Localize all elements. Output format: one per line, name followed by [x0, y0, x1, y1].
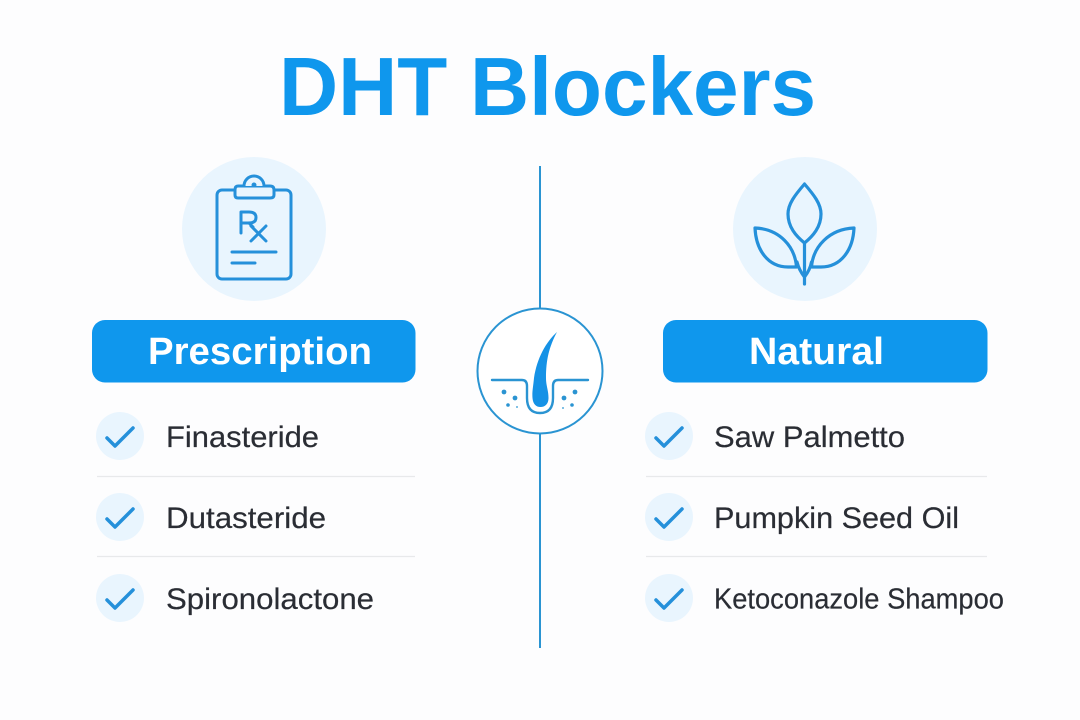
list item: Finasteride — [96, 412, 319, 460]
list item: Spironolactone — [96, 574, 374, 622]
list item: Ketoconazole Shampoo: Ketoconazole Shampoo — [714, 584, 1004, 616]
list item: Spironolactone: Spironolactone — [166, 583, 374, 616]
heading: prescription: Prescription — [148, 331, 372, 373]
icon: hair follicle — [478, 308, 602, 434]
list item: Pumpkin Seed Oil: Pumpkin Seed Oil — [714, 502, 959, 535]
heading: natural: Natural — [749, 331, 884, 373]
list item: Dutasteride — [96, 493, 326, 541]
list item: Pumpkin Seed Oil — [645, 493, 959, 541]
list item: Dutasteride: Dutasteride — [166, 502, 326, 535]
list item: Finasteride: Finasteride — [166, 421, 319, 454]
panel: prescription — [92, 320, 416, 622]
heading: natural — [663, 320, 988, 382]
list item: Saw Palmetto: Saw Palmetto — [714, 421, 905, 454]
panel: natural — [645, 320, 1004, 622]
list item: Ketoconazole Shampoo — [645, 574, 1004, 622]
list item: Saw Palmetto — [645, 412, 905, 460]
title: DHT Blockers — [279, 40, 816, 133]
icon: prescription clipboard — [182, 157, 326, 301]
icon: natural leaves — [733, 157, 877, 301]
center divider line — [539, 166, 541, 648]
heading: prescription — [92, 320, 416, 382]
